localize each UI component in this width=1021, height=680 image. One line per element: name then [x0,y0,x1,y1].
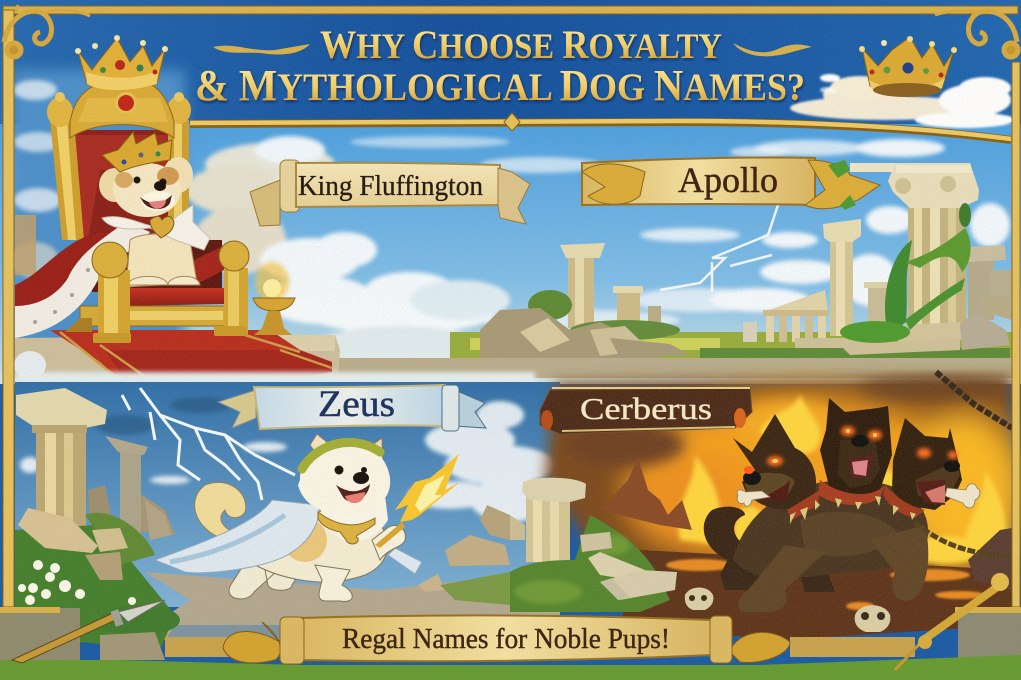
banner text: King Fluffington [298,171,483,202]
panel: throne scene [14,35,340,380]
left column [16,388,107,533]
front left leg [738,545,825,612]
distant temple [743,282,894,342]
throne back and posts [47,84,225,292]
banner: Cerberus [540,388,752,434]
banner text: Zeus [318,384,395,425]
scorched ground [620,550,1012,640]
title flourish right [733,43,812,56]
royal robe [15,222,150,338]
brazier [253,262,295,335]
title: WHY CHOOSE ROYALTY [320,22,722,67]
skulls [685,588,890,632]
small crown on dog [102,132,172,172]
crown top right [859,36,957,97]
header divider rail [190,122,1011,140]
chain lower [915,522,1012,556]
left head [733,414,816,510]
dog head [99,157,193,217]
dark storm cloud [95,397,230,435]
distant blue pool [165,625,280,640]
green foliage and rocks [15,500,180,650]
grass strip [0,655,1021,680]
lightning [122,388,295,500]
meadow [320,332,1015,378]
title [195,22,805,110]
banner text: Cerberus [580,391,712,426]
raised paw [372,525,405,560]
right armrest [214,241,249,336]
title flourish left [213,44,310,54]
panel: Zeus scene [15,382,560,650]
right swirl [730,632,790,663]
right lower rock [968,528,1012,590]
corner ornament top-right [935,11,1018,57]
mossy rubble [510,515,677,612]
title: & MYTHOLOGICAL DOG NAMES? [195,61,805,110]
body [733,480,928,578]
banner: Zeus [218,384,486,431]
lightning bolt [660,205,778,292]
front leg [315,565,352,601]
right rocks [960,296,1012,350]
ermine collar [102,205,210,250]
stone steps [14,335,340,379]
panel: meadow and distant ruins [320,163,1015,378]
spiked collars [787,480,925,524]
panel: fire scene [545,376,1021,640]
header background [0,0,1021,128]
header clouds [790,74,1015,128]
mid-left ruined columns [560,243,661,334]
sword [12,600,165,663]
illustration: Zeus dog [155,434,460,601]
front right leg [870,525,928,601]
big ivy column [840,163,979,355]
red carpet [50,330,332,380]
rear legs [720,545,835,592]
right rocks [418,505,510,605]
lightning torch [375,522,405,548]
white flowers [18,560,136,605]
middle head [820,398,892,505]
dog body [126,234,197,287]
panel: sky with clouds [0,70,1021,384]
banner: Apollo [582,158,880,210]
flames [678,395,1007,565]
left swirl [223,622,281,663]
bottom scroll banner [223,615,790,664]
illustration: Cerberus [704,372,1012,612]
dog paws [128,276,200,285]
stone path [130,572,560,640]
banner: King Fluffington [250,160,530,226]
volcanic crags [600,458,692,530]
sceptre [895,573,1009,670]
left roll [280,617,304,664]
illustration: broken column [522,478,586,562]
scroll text: Regal Names for Noble Pups! [342,624,670,655]
left distant tower [15,215,36,275]
chain left upper [936,372,1012,428]
rocks and shrubs [480,290,690,358]
heart brooch [150,216,174,238]
mist between scenes [15,372,535,384]
chest and head [298,434,390,541]
left armrest [92,242,131,343]
body [255,511,388,582]
large crown [75,35,168,90]
rear rocks [88,485,175,535]
second column [105,436,148,534]
bones [737,484,980,508]
left ornament [582,164,645,204]
leaves [828,160,856,210]
stone base and gold plinth [0,607,1021,663]
tail [704,507,755,562]
small ornament on rail [504,113,520,131]
right roll [710,616,732,663]
middle tall column [795,219,875,348]
banner text: Apollo [678,160,778,200]
throne seat [65,288,226,332]
tail [195,482,246,540]
corner ornament top-left [4,5,90,57]
right head [892,418,962,510]
cape [155,500,319,573]
back right column [960,245,1012,320]
right ornament [805,160,880,209]
rear legs [229,555,300,599]
gold collar [318,512,375,544]
